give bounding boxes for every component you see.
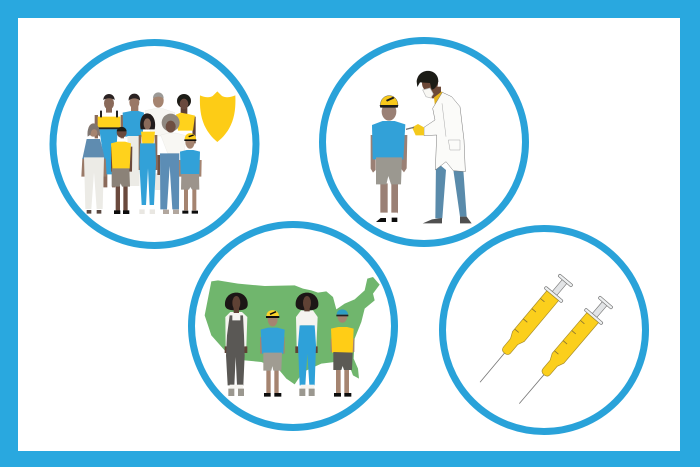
US map (205, 277, 380, 384)
circle ring: syringes (442, 228, 646, 432)
child in yellow shirt with blue cap (331, 309, 354, 397)
group of people (81, 91, 235, 214)
syringe left (471, 272, 575, 390)
person: front row grandmother (157, 114, 186, 214)
person: back row older man (145, 92, 175, 190)
person: back row woman (95, 94, 124, 187)
child in blue shirt with yellow cap (260, 310, 285, 397)
panel: child receiving vaccine (322, 40, 526, 244)
syringe right (511, 294, 615, 411)
circle ring: community (53, 42, 256, 246)
woman in blue trousers (295, 293, 318, 396)
circle ring: vaccination (322, 40, 526, 244)
woman in overalls (225, 293, 248, 396)
doctor in lab coat (406, 71, 472, 223)
person: front row boy in yellow shirt (111, 127, 132, 214)
person: front row boy in cap (179, 133, 202, 214)
person: front row woman in white trousers (81, 123, 107, 214)
panel: community group (53, 42, 256, 246)
pair of syringes (471, 272, 615, 411)
vaccination scene (371, 71, 472, 223)
map and people scene (205, 277, 380, 397)
icon: yellow shield (200, 91, 235, 142)
person: front row girl in blue trousers (139, 113, 157, 214)
panel: syringes (442, 228, 646, 432)
circle ring: nation (192, 224, 394, 428)
child with cap (371, 96, 407, 222)
person: back row woman with curly hair (176, 94, 196, 143)
panel: US map with people (192, 224, 394, 428)
person: back row man (123, 94, 144, 186)
